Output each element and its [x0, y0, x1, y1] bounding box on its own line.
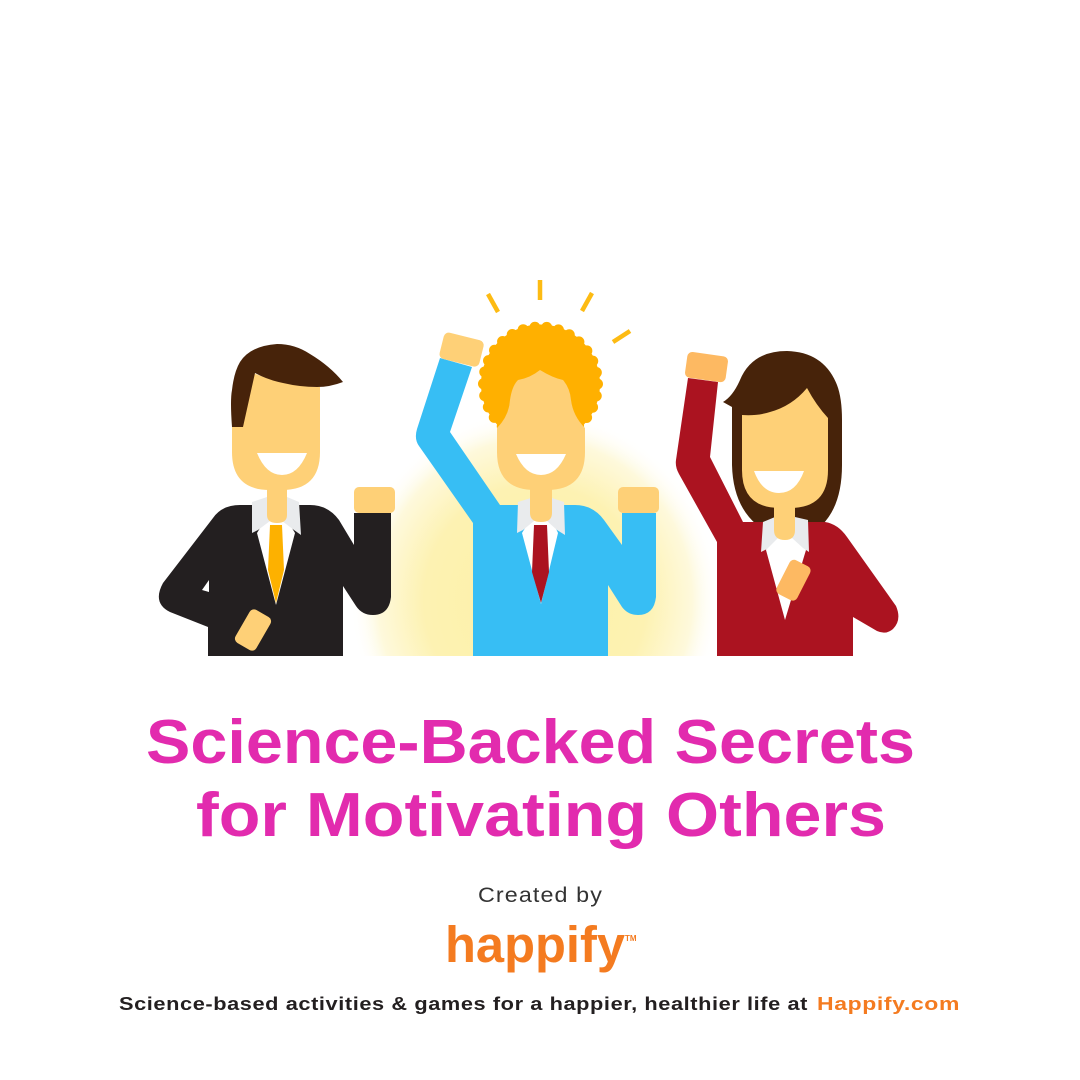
hand on chest	[775, 558, 812, 602]
title	[146, 708, 915, 850]
curly hair	[481, 324, 600, 444]
tie	[532, 525, 549, 603]
face	[497, 370, 585, 490]
raised fist	[684, 351, 729, 383]
long hair	[723, 351, 842, 525]
raised fist right	[618, 487, 659, 513]
neck	[774, 495, 795, 540]
mouth	[754, 471, 804, 493]
black suit	[159, 505, 391, 656]
collar	[761, 517, 809, 552]
light rays	[488, 280, 630, 342]
blue suit	[416, 358, 656, 656]
title: Science-Backed Secrets	[146, 708, 915, 777]
infographic canvas	[120, 280, 958, 1014]
red suit	[676, 378, 898, 656]
raised fist left	[438, 332, 485, 368]
figure: man in black suit	[159, 344, 395, 656]
neck	[267, 480, 287, 523]
shirt	[766, 535, 806, 620]
face	[742, 388, 828, 508]
raised fist	[354, 487, 395, 513]
happify logo: TM	[625, 934, 637, 943]
lower fist	[233, 608, 273, 652]
shirt	[522, 520, 558, 604]
armpit gap	[202, 580, 209, 592]
hair	[231, 344, 343, 427]
background glow	[364, 428, 706, 656]
collar	[252, 497, 301, 535]
tagline	[119, 993, 960, 1014]
tagline: Happify.com	[817, 993, 960, 1014]
figure: woman in red suit	[676, 351, 898, 656]
mouth	[257, 453, 307, 475]
tie	[268, 525, 284, 603]
happify logo: happify	[445, 916, 626, 973]
shirt	[257, 520, 295, 605]
tagline: Science-based activities & games for a happier, healthier life at	[119, 993, 808, 1014]
title: for Motivating Others	[196, 781, 886, 850]
neck	[530, 480, 552, 522]
created by label: Created by	[478, 884, 603, 907]
collar	[517, 498, 565, 535]
mouth	[516, 454, 566, 475]
face	[232, 373, 320, 490]
figure: man in blue suit	[416, 280, 659, 656]
